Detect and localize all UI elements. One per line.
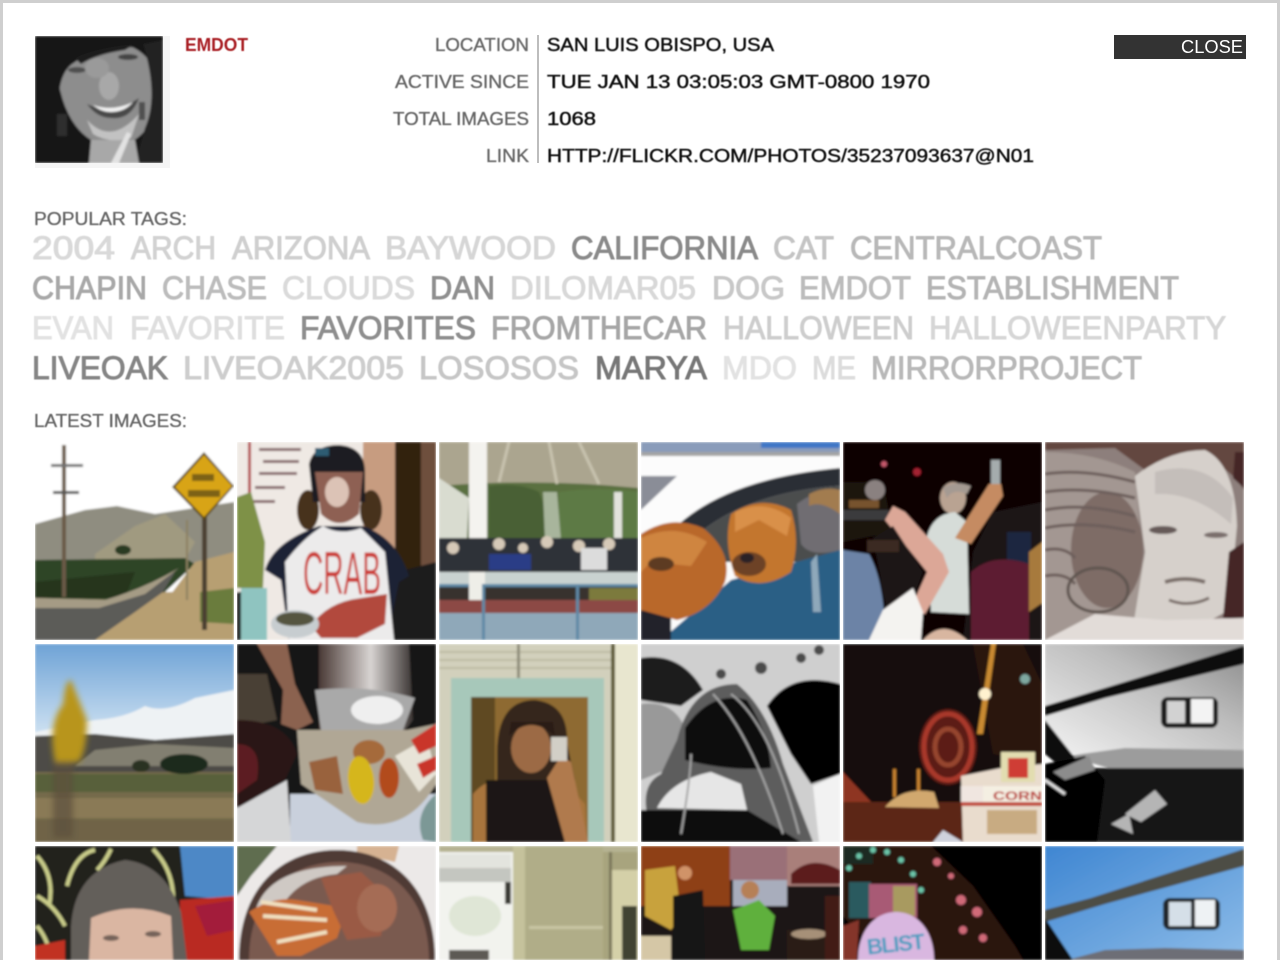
profile field labels: ACTIVE SINCE xyxy=(395,72,529,92)
photo: carnival sign: BLIST xyxy=(866,929,927,960)
latest images heading: LATEST IMAGES: xyxy=(34,411,187,431)
tag cloud: 2004 xyxy=(32,230,115,266)
tag cloud: EVAN xyxy=(32,310,114,346)
photo: black and white car mirror xyxy=(1045,644,1244,842)
tag cloud xyxy=(32,230,1226,386)
photo: mirror self-portrait xyxy=(439,644,638,842)
photo: valley with blurred sign xyxy=(35,644,234,842)
profile field values: TUE JAN 13 03:05:03 GMT-0800 1970 xyxy=(547,72,930,92)
tag cloud: ME xyxy=(812,350,856,386)
photo: woman among flowers xyxy=(35,846,234,960)
username: EMDOT xyxy=(185,35,248,55)
photo: crab on a platter xyxy=(237,846,436,960)
image grid xyxy=(35,442,1244,960)
tag cloud: CHASE xyxy=(162,270,267,306)
profile field values: 1068 xyxy=(547,109,596,129)
tag cloud: MDO xyxy=(722,350,797,386)
photo: gazebo gathering xyxy=(439,442,638,640)
photo: blue sky car mirror xyxy=(1045,846,1244,960)
tag cloud: CHAPIN xyxy=(32,270,147,306)
profile field labels xyxy=(393,35,529,166)
tag cloud: LOSOSOS xyxy=(419,350,579,386)
tag cloud: ESTABLISHMENT xyxy=(926,270,1179,306)
photo: shar-pei dogs in car xyxy=(641,442,840,640)
photo: county fair at night xyxy=(843,644,1042,842)
tag cloud: LIVEOAK xyxy=(32,350,168,386)
profile field labels: LINK xyxy=(486,146,529,166)
tag cloud: CALIFORNIA xyxy=(571,230,759,266)
tag cloud: LIVEOAK2005 xyxy=(183,350,404,386)
tag cloud: CENTRALCOAST xyxy=(850,230,1102,266)
tag cloud: DAN xyxy=(430,270,495,306)
tag cloud: HALLOWEEN xyxy=(723,310,914,346)
profile field labels: TOTAL IMAGES xyxy=(393,109,529,129)
photo: band playing on stage xyxy=(641,846,840,960)
profile field values: SAN LUIS OBISPO, USA xyxy=(547,35,774,55)
tag cloud: EMDOT xyxy=(799,270,911,306)
close button: CLOSE xyxy=(1181,37,1243,57)
photo: sepia double-exposure faces xyxy=(1045,442,1244,640)
tag cloud: ARIZONA xyxy=(232,230,371,266)
photo: woman in crab t-shirt xyxy=(237,442,436,640)
tag cloud: FAVORITE xyxy=(130,310,285,346)
avatar photo xyxy=(35,36,170,168)
profile field values xyxy=(547,35,1034,166)
tag cloud: FAVORITES xyxy=(300,310,476,346)
tag cloud: CAT xyxy=(773,230,834,266)
profile field labels: LOCATION xyxy=(435,35,529,55)
photo: crab boil pot xyxy=(237,644,436,842)
photo: doorway xyxy=(439,846,638,960)
tag cloud: DOG xyxy=(712,270,785,306)
tag cloud: BAYWOOD xyxy=(385,230,556,266)
tag cloud: FROMTHECAR xyxy=(491,310,707,346)
photo: night crowd with raised arms xyxy=(843,442,1042,640)
tag cloud: HALLOWEENPARTY xyxy=(929,310,1226,346)
tag cloud: ARCH xyxy=(131,230,216,266)
photo: road with slow sign xyxy=(35,444,234,640)
photo: carnival sign xyxy=(843,846,1042,960)
profile field values: HTTP://FLICKR.COM/PHOTOS/35237093637@N01 xyxy=(547,146,1034,166)
tag cloud: CLOUDS xyxy=(282,270,415,306)
photo: county fair at night: CORN xyxy=(993,789,1042,803)
close button xyxy=(1114,35,1246,59)
tag cloud: MIRRORPROJECT xyxy=(871,350,1142,386)
photo: black and white couple kissing xyxy=(641,644,840,842)
tag cloud: DILOMAR05 xyxy=(510,270,696,306)
tag cloud: MARYA xyxy=(595,350,708,386)
popular tags heading: POPULAR TAGS: xyxy=(34,209,187,229)
